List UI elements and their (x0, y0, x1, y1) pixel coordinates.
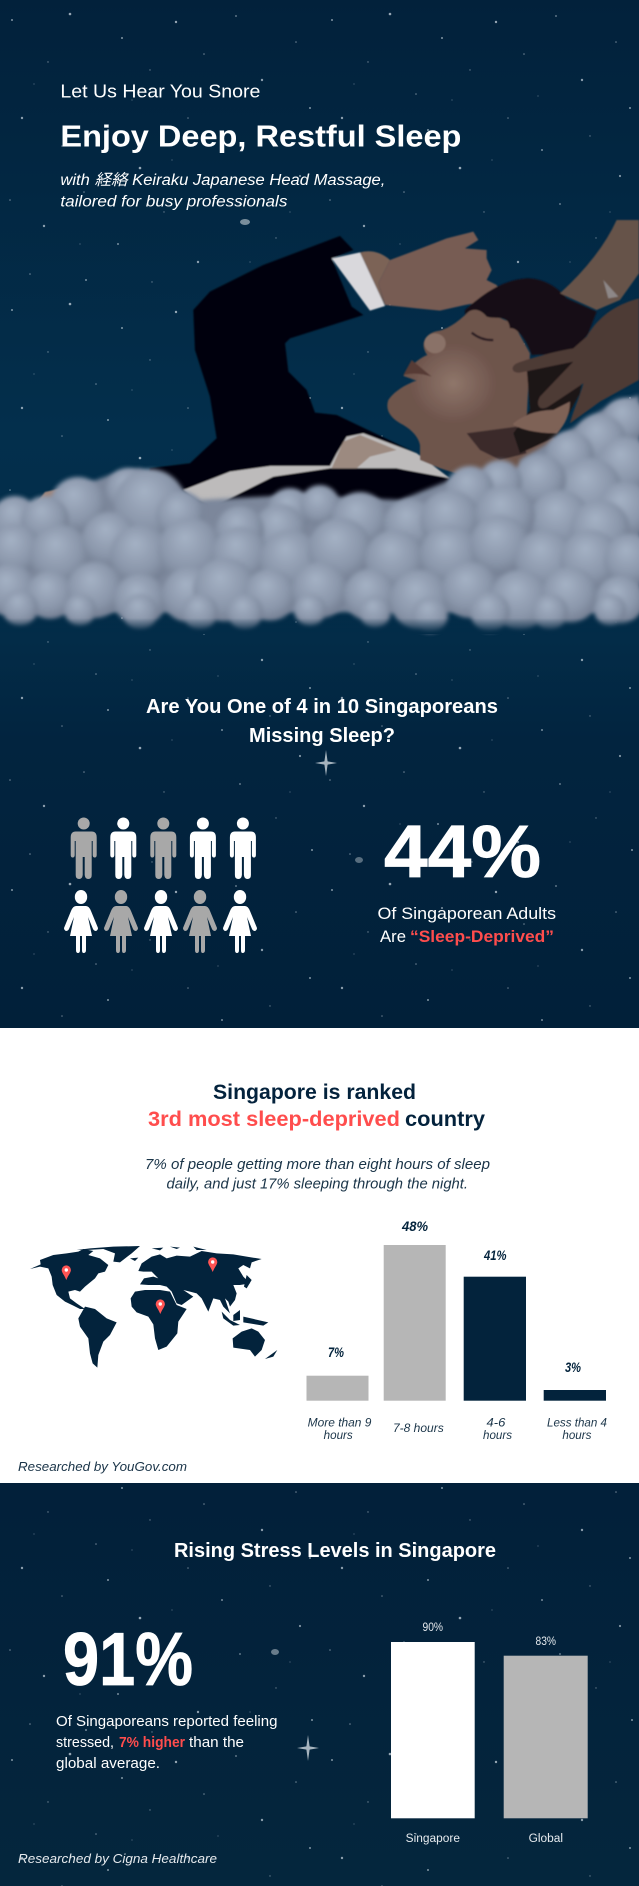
ranking description: 7% of people getting more than eight hours of sleep (145, 1157, 490, 1173)
bar chart: stress Singapore vs global: Singapore (406, 1833, 460, 1845)
stat caption (378, 905, 556, 946)
bar chart: hours of sleep: hours (324, 1430, 353, 1442)
decorative bright star (297, 1735, 319, 1761)
big stat: 91%: 91% (63, 1617, 193, 1701)
bar chart: hours of sleep: 41% (483, 1247, 507, 1263)
panel: stress section background (0, 1483, 639, 1886)
stress description: 7% higher (119, 1734, 185, 1751)
bar chart: hours of sleep: hours (562, 1430, 592, 1442)
panel: hero and missing-sleep night sky background (0, 0, 639, 1028)
bar chart: hours of sleep: 48% (401, 1218, 429, 1234)
left hand tip (27, 487, 67, 520)
source: YouGov: Researched by YouGov.com (18, 1459, 187, 1474)
stress description: Of Singaporeans reported feeling (56, 1713, 278, 1730)
bar chart: stress Singapore vs global: 90% (422, 1622, 443, 1634)
bar chart: hours of sleep (306, 1218, 607, 1442)
heading: missing sleep (146, 696, 498, 747)
jacket and arm (148, 236, 450, 510)
pictogram: 10 people, 4 highlighted in grey (64, 818, 257, 953)
bar chart: hours of sleep: More than 9 (308, 1418, 372, 1430)
decorative bright star (315, 750, 337, 776)
big stat: 44%: 44% (384, 810, 541, 893)
ranking description: daily, and just 17% sleeping through the night. (166, 1176, 468, 1192)
heading: ranking: country (405, 1108, 485, 1131)
hero kicker: Let Us Hear You Snore (60, 80, 260, 102)
hero title: Enjoy Deep, Restful Sleep (60, 120, 461, 154)
ranking description (145, 1157, 490, 1192)
heading: ranking (148, 1081, 485, 1131)
illustration: clouds (0, 395, 639, 634)
stat caption: Of Singaporean Adults (378, 905, 556, 923)
stress description: global average. (56, 1755, 160, 1772)
bar chart: stress Singapore vs global: 83% (536, 1636, 556, 1648)
panel: ranking section (0, 1028, 639, 1483)
heading: ranking: 3rd most sleep-deprived (148, 1108, 400, 1131)
bar chart: hours of sleep: 4-6 (486, 1418, 506, 1430)
source: Cigna: Researched by Cigna Healthcare (18, 1851, 217, 1866)
heading: ranking: Singapore is ranked (213, 1081, 416, 1104)
bar chart: stress Singapore vs global: Global (529, 1833, 563, 1845)
hero subtitle: tailored for busy professionals (60, 194, 288, 210)
stat caption: “Sleep-Deprived” (410, 928, 554, 946)
world map with pins (30, 1246, 277, 1368)
heading: missing sleep: Are You One of 4 in 10 Singaporeans (146, 696, 498, 718)
illustration: sleeping woman receiving head massage (27, 220, 639, 520)
heading: stress: Rising Stress Levels in Singapore (174, 1540, 496, 1562)
bar chart: stress Singapore vs global (391, 1622, 588, 1845)
stress description (56, 1713, 278, 1772)
bar chart: hours of sleep: Less than 4 (547, 1418, 607, 1430)
bar chart: hours of sleep: 7% (328, 1344, 344, 1360)
hero subtitle (60, 171, 385, 210)
hero subtitle: with 経絡 Keiraku Japanese Head Massage, (60, 171, 385, 189)
stress description: stressed, (56, 1734, 114, 1751)
head, hand and masseur hands (332, 220, 639, 477)
bar chart: hours of sleep: 3% (565, 1359, 581, 1375)
bar chart: hours of sleep: 7-8 hours (393, 1423, 444, 1435)
stat caption: Are (380, 928, 406, 946)
heading: missing sleep: Missing Sleep? (249, 725, 395, 747)
stress description: than the (189, 1734, 244, 1751)
bar chart: hours of sleep: hours (483, 1430, 512, 1442)
